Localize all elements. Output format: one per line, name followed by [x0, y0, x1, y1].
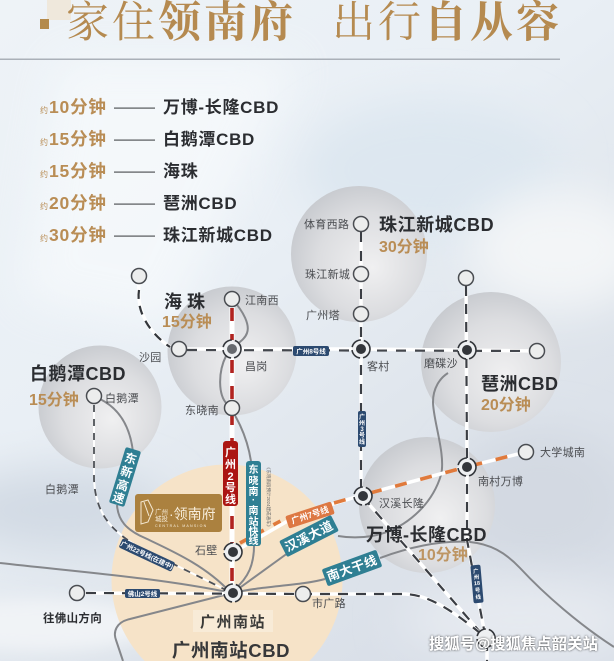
line tag: line 3	[358, 411, 366, 447]
station names: 石壁	[195, 543, 218, 557]
line tag: line 18: 18	[474, 581, 480, 587]
line tag: Guangzhou line 2: 广	[225, 445, 236, 459]
station names	[43, 217, 585, 625]
row: 15 minutes Haizhu: 约	[40, 169, 48, 179]
row: 30 minutes: 30分钟	[49, 225, 107, 245]
station names: 客村	[367, 359, 390, 373]
station names: 昌岗	[245, 360, 268, 373]
station names: 东晓南	[185, 404, 219, 417]
line tag: line 3: 号	[359, 432, 365, 439]
line tag: Dongxiaonan express: 晓	[248, 475, 258, 487]
station names: 大学城南	[540, 445, 585, 459]
row: 15 minutes Baietan: 白鹅潭CBD	[163, 129, 255, 149]
line tag: line 18	[470, 565, 484, 603]
district label: Zhujiang New Town: 珠江新城CBD	[379, 214, 494, 235]
Guangzhou South label: 广州南站	[200, 613, 266, 631]
title	[40, 0, 562, 47]
row: 15 minutes Baietan: 15分钟	[49, 129, 107, 149]
Shayuan branch	[139, 283, 170, 347]
line tag: line 3: 线	[359, 438, 365, 446]
logo: Central Mansion: 广州	[155, 507, 168, 516]
line tag: line 8: 广州8号线	[296, 346, 326, 356]
district label: Pazhou: 琶洲CBD	[481, 374, 558, 394]
row: 10 minutes	[40, 97, 279, 117]
station names: 往佛山方向	[43, 611, 102, 625]
logo: Central Mansion: 城投	[155, 514, 168, 523]
row: 30 minutes	[40, 225, 273, 245]
line tag: Foshan line 2: 佛山2号线	[128, 589, 158, 598]
district label: Haizhu: 海珠	[164, 292, 210, 312]
district label: Pazhou	[481, 374, 558, 414]
gray expressways	[0, 299, 614, 661]
line tag: Dongxiaonan express: ·	[252, 495, 255, 506]
row: 30 minutes: 珠江新城CBD	[163, 225, 273, 245]
district label: Baietan: 白鹅潭CBD	[30, 364, 126, 384]
line tag: line 18: 线	[475, 593, 482, 601]
row: 20 minutes: 20分钟	[49, 193, 107, 213]
metro line 3	[361, 224, 487, 661]
line tag: Dongxiaonan express: 站	[248, 515, 258, 528]
district label: Haizhu: 15分钟	[162, 313, 212, 331]
row: 20 minutes: 琶洲CBD	[163, 194, 237, 213]
line tag: Guangzhou line 2	[223, 441, 238, 506]
line tag: Dongxiaonan express: 南	[248, 504, 258, 517]
metro line 2	[230, 305, 234, 592]
station names: 磨碟沙	[424, 357, 458, 370]
vertical note: 《东晓南段预计2024建成通车》	[265, 465, 272, 529]
district label: Baietan: 15分钟	[29, 391, 79, 409]
station names: 白鹅潭	[105, 391, 139, 405]
line tag: Guangzhou line 2: 线	[225, 492, 236, 506]
district label: Zhujiang New Town: 30分钟	[379, 238, 429, 256]
row: 15 minutes Baietan: 约	[40, 137, 48, 147]
line tag: line 8	[293, 346, 329, 356]
line tag: line 3: 3	[360, 427, 364, 433]
line tag: Dongxin expressway: 新	[119, 463, 135, 481]
line tag: line 22: 广州22号线(在建中)	[119, 539, 175, 571]
line tag: Dongxin expressway	[109, 447, 141, 507]
Guangzhou South CBD label: 广州南站CBD	[172, 640, 290, 661]
line tag: Dongxiaonan express: 快	[248, 525, 258, 538]
line tag: Dongxiaonan express	[246, 461, 261, 547]
station names: 白鹅潭	[45, 482, 79, 496]
line tag: Foshan line 2	[125, 589, 160, 598]
row: 10 minutes: 10分钟	[49, 97, 107, 117]
metro line 18	[466, 278, 486, 640]
line tag: Guangzhou line 2: 号	[225, 481, 236, 494]
station names: 珠江新城	[305, 267, 350, 281]
district label: Wanbo-Changlong: 10分钟	[418, 546, 468, 564]
row: 10 minutes: 万博-长隆CBD	[163, 97, 279, 117]
metro line 7	[234, 452, 526, 552]
line tag: Dongxin expressway: 东	[123, 449, 139, 467]
station names: 汉溪长隆	[379, 496, 424, 510]
watermark: 搜狐号@搜狐焦点韶关站	[429, 635, 598, 653]
district label: Pazhou: 20分钟	[481, 396, 531, 414]
district label: Zhujiang New Town	[379, 214, 494, 256]
district label: Wanbo-Changlong: 万博-长隆CBD	[366, 525, 487, 545]
logo: Central Mansion: CENTRAL MANSION	[155, 524, 207, 528]
station names: 体育西路	[304, 217, 349, 231]
Foshan line 2	[78, 593, 486, 638]
interchange stations	[223, 340, 495, 647]
district circles	[38, 186, 561, 661]
line tag: Dongxin expressway: 高	[115, 476, 130, 494]
Guangzhou South label	[193, 610, 273, 632]
line tag: line 7: 广州7号线	[290, 504, 330, 526]
district label: Baietan	[29, 364, 126, 409]
line tag: Guangzhou line 2: 州	[225, 458, 236, 471]
station names: 市广路	[312, 596, 346, 610]
district label: Wanbo-Changlong	[366, 525, 487, 564]
line tag: Dongxiaonan express: 南	[248, 485, 258, 498]
row: 15 minutes Haizhu	[40, 161, 198, 181]
station names: 广州塔	[306, 309, 340, 322]
row: 15 minutes Haizhu: 15分钟	[49, 161, 107, 181]
row: 30 minutes: 约	[40, 233, 48, 243]
row: 15 minutes Haizhu: 海珠	[163, 162, 198, 181]
title: 出行自从容	[332, 0, 562, 47]
row: 20 minutes	[40, 193, 237, 213]
line tag: Hanxi avenue: 汉溪大道	[282, 517, 336, 555]
line tag: line 18: 号	[475, 587, 481, 594]
station names: 南村万博	[478, 474, 523, 488]
line tag: line 3: 广	[359, 413, 365, 421]
logo: Central Mansion: ·领南府	[169, 506, 216, 522]
line tag: Nanda trunk: 南大干线	[325, 552, 379, 584]
line tag: line 3: 州	[359, 420, 365, 427]
title: 家住领南府	[66, 0, 296, 47]
line tag: Dongxin expressway: 速	[111, 489, 127, 506]
line tag: line 7	[285, 501, 335, 529]
station names: 沙园	[139, 351, 162, 364]
station names: 江南西	[245, 294, 279, 307]
district label: Haizhu	[162, 292, 212, 331]
logo: Central Mansion	[135, 494, 222, 532]
travel time list	[40, 97, 279, 245]
metro line 8	[179, 349, 537, 351]
line tag: Dongxiaonan express: 东	[248, 463, 258, 476]
line tag: line 18: 广	[473, 567, 479, 575]
row: 20 minutes: 约	[40, 201, 48, 211]
row: 10 minutes: 约	[40, 105, 48, 115]
metro line 22	[94, 405, 226, 590]
line tag: line 18: 州	[473, 574, 479, 581]
line tag: Guangzhou line 2: 2	[227, 471, 234, 483]
regular stations	[70, 216, 544, 602]
line tag: Dongxiaonan express: 线	[248, 534, 258, 547]
row: 15 minutes Baietan	[40, 129, 255, 149]
